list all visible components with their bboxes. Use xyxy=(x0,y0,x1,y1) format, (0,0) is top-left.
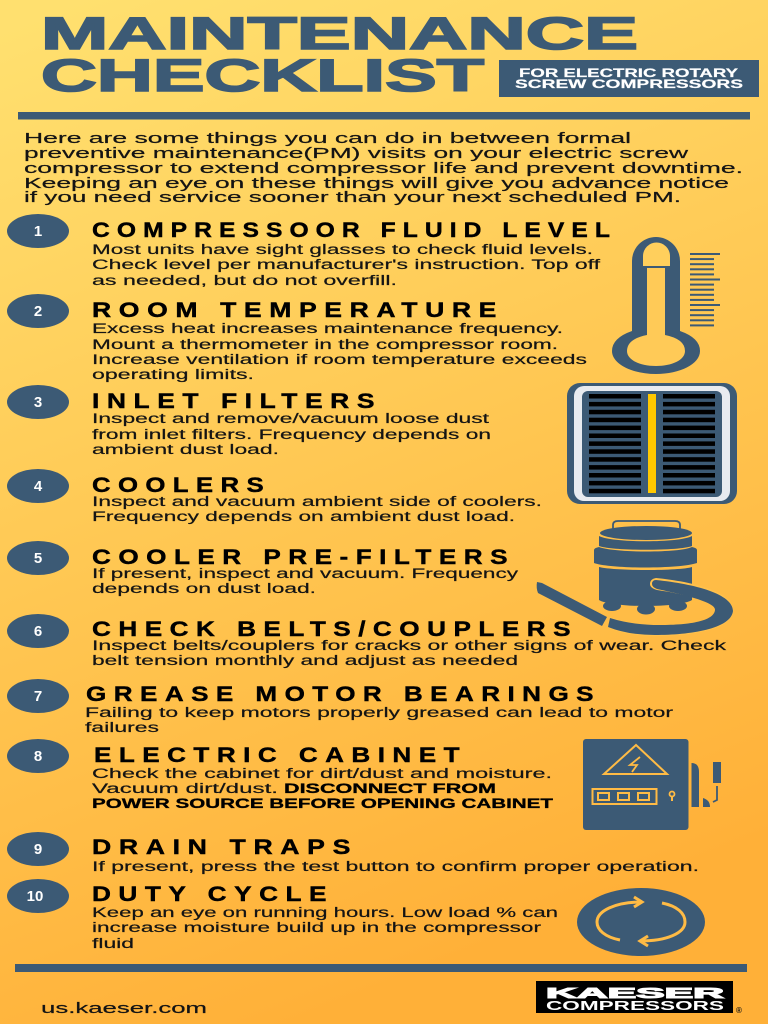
item 8: electric cabinet: DISCONNECT FROM xyxy=(284,781,496,796)
item 9: drain traps: If present, press the test button to confirm proper operation. xyxy=(92,859,699,874)
kaeser logo: KAESER xyxy=(546,985,724,1002)
intro text: preventive maintenance(PM) visits on your electric screw xyxy=(24,145,688,162)
item 3: inlet filters: Inspect and remove/vacuum loose dust xyxy=(92,411,489,426)
item 7: grease motor bearings: GREASE MOTOR BEARINGS xyxy=(86,683,601,706)
item 6: check belts/couplers: Inspect belts/couplers for cracks or other signs of wear. Check xyxy=(92,638,726,653)
item 2: room temperature: Excess heat increases maintenance frequency. xyxy=(92,321,563,336)
item 2: room temperature: Increase ventilation if room temperature exceeds xyxy=(92,352,587,367)
intro text xyxy=(24,130,743,206)
item 4: coolers xyxy=(7,469,542,524)
icon: vacuum cleaner xyxy=(537,521,733,636)
item 8: electric cabinet: ELECTRIC CABINET xyxy=(94,744,467,767)
item 1: compressor fluid level: Check level per manufacturer's instruction. Top off xyxy=(92,257,600,272)
icon: air filter xyxy=(567,383,737,504)
item 5: cooler pre-filters: depends on dust load. xyxy=(92,581,316,596)
item 3: inlet filters: 3 xyxy=(34,394,42,411)
item 7: grease motor bearings: 7 xyxy=(34,688,42,705)
kaeser logo: ® xyxy=(736,1006,742,1015)
icon: cycle arrows xyxy=(577,888,705,956)
item 3: inlet filters: from inlet filters. Frequency depends on xyxy=(92,427,491,442)
intro text: Keeping an eye on these things will give you advance notice xyxy=(24,175,729,192)
item 10: duty cycle: 10 xyxy=(27,888,43,905)
item 1: compressor fluid level: 1 xyxy=(34,223,42,240)
item 5: cooler pre-filters: 5 xyxy=(34,550,42,567)
item 9: drain traps: 9 xyxy=(34,841,42,858)
title: MAINTENANCE xyxy=(41,8,638,59)
item 1: compressor fluid level: as needed, but do not overfill. xyxy=(92,273,397,288)
item 4: coolers: Inspect and vacuum ambient side of coolers. xyxy=(92,494,542,509)
item 8: electric cabinet xyxy=(7,739,554,811)
item 2: room temperature xyxy=(7,294,587,382)
item 5: cooler pre-filters: COOLER PRE-FILTERS xyxy=(92,546,515,569)
item 2: room temperature: 2 xyxy=(34,303,42,320)
item 6: check belts/couplers xyxy=(7,614,726,668)
title xyxy=(41,8,638,101)
item 8: electric cabinet: POWER SOURCE BEFORE OPENING CABINET xyxy=(92,796,554,811)
item 9: drain traps xyxy=(7,832,699,874)
item 3: inlet filters: ambient dust load. xyxy=(92,442,279,457)
item 6: check belts/couplers: 6 xyxy=(34,623,42,640)
item 6: check belts/couplers: belt tension monthly and adjust as needed xyxy=(92,653,518,668)
item 10: duty cycle: fluid xyxy=(92,936,134,951)
item 2: room temperature: ROOM TEMPERATURE xyxy=(92,299,504,322)
subtitle box: FOR ELECTRIC ROTARY xyxy=(519,66,738,80)
item 1: compressor fluid level xyxy=(7,214,617,288)
item 7: grease motor bearings: failures xyxy=(85,720,159,735)
item 7: grease motor bearings: Failing to keep motors properly greased can lead to motor xyxy=(85,705,674,720)
item 4: coolers: COOLERS xyxy=(92,474,271,497)
item 10: duty cycle: DUTY CYCLE xyxy=(92,883,334,906)
item 4: coolers: 4 xyxy=(34,478,43,495)
subtitle box xyxy=(499,60,759,97)
kaeser logo xyxy=(536,981,742,1015)
item 6: check belts/couplers: CHECK BELTS/COUPLERS xyxy=(92,618,578,641)
item 8: electric cabinet: 8 xyxy=(34,748,42,765)
item 10: duty cycle: Keep an eye on running hours. Low load % can xyxy=(92,905,558,920)
intro text: Here are some things you can do in between formal xyxy=(24,130,631,147)
item 3: inlet filters xyxy=(7,385,491,457)
website url: us.kaeser.com xyxy=(41,1000,207,1017)
item 10: duty cycle xyxy=(7,879,558,951)
item 4: coolers: Frequency depends on ambient dust load. xyxy=(92,509,515,524)
intro text: if you need service sooner than your next scheduled PM. xyxy=(24,189,681,206)
item 8: electric cabinet: Vacuum dirt/dust. xyxy=(92,781,278,796)
item 10: duty cycle: increase moisture build up in the compressor xyxy=(92,920,542,935)
intro text: compressor to extend compressor life and prevent downtime. xyxy=(24,160,743,177)
item 3: inlet filters: INLET FILTERS xyxy=(92,390,382,413)
item 2: room temperature: operating limits. xyxy=(92,367,254,382)
item 8: electric cabinet: Check the cabinet for dirt/dust and moisture. xyxy=(92,766,552,781)
item 9: drain traps: DRAIN TRAPS xyxy=(92,836,358,859)
item 5: cooler pre-filters xyxy=(7,541,518,596)
item 5: cooler pre-filters: If present, inspect and vacuum. Frequency xyxy=(92,566,518,581)
icon: electric cabinet xyxy=(583,739,721,830)
icon: thermometer xyxy=(612,237,720,374)
item 2: room temperature: Mount a thermometer in the compressor room. xyxy=(92,337,558,352)
item 1: compressor fluid level: Most units have sight glasses to check fluid levels. xyxy=(92,242,593,257)
item 7: grease motor bearings xyxy=(7,679,674,735)
item 1: compressor fluid level: COMPRESSOOR FLUID LEVEL xyxy=(92,219,617,242)
kaeser logo: COMPRESSORS xyxy=(546,999,724,1013)
subtitle box: SCREW COMPRESSORS xyxy=(515,77,743,91)
title: CHECKLIST xyxy=(41,50,484,101)
